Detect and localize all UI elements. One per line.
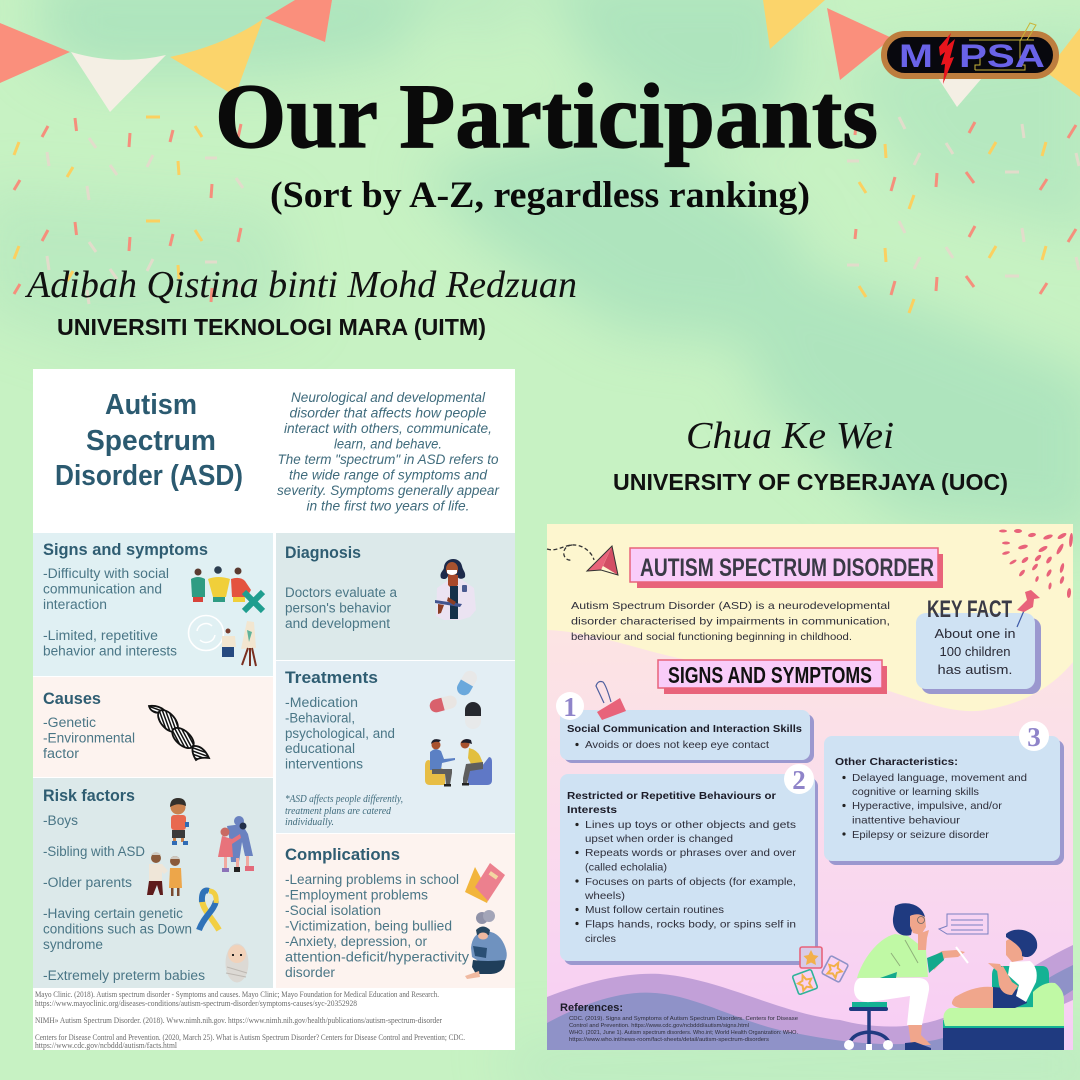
bottom waves: [547, 945, 1073, 1050]
panel: risk factors: -Older parents: [43, 875, 132, 890]
note: treatment plans are catered: [285, 806, 392, 817]
intro paragraph: behaviour and social functioning beginning in childhood.: [571, 631, 852, 643]
panel: risk factors: -Sibling with ASD: [43, 844, 145, 859]
therapist: [854, 903, 968, 1050]
panel: risk factors: -Boys: [43, 813, 78, 828]
panel: complications: [276, 834, 515, 988]
icon: repeat circle and painter: [188, 616, 256, 666]
panel title: [55, 389, 243, 492]
panel: risk factors: [33, 778, 273, 988]
card 2: restricted behaviours: (called echolalia): [585, 862, 667, 874]
panel: complications: -Anxiety, depression, or: [285, 934, 427, 949]
panel: left infographic: [33, 369, 515, 1050]
icon: sad person: [465, 910, 507, 979]
panel: complications: disorder: [285, 965, 336, 980]
panel: risk factors: syndrome: [43, 937, 103, 952]
note: [285, 794, 403, 828]
panel: signs and symptoms: behavior and interests: [43, 644, 177, 658]
icon: push pin: [1017, 590, 1040, 627]
panel: signs and symptoms: -Difficulty with social: [43, 566, 169, 581]
intro text: in the first two years of life.: [306, 498, 470, 514]
icon: boy: [170, 798, 189, 845]
bunting flags right: [763, 0, 1080, 107]
intro text: interact with others, communicate,: [284, 421, 492, 436]
card 2: restricted behaviours: Focuses on parts of objects (for example,: [585, 876, 796, 888]
icon: notebooks: [465, 863, 505, 903]
panel: diagnosis: Doctors evaluate a: [285, 585, 397, 600]
card 1: social communication: Social Communication and Interaction Skills: [567, 723, 802, 735]
university 1: UNIVERSITI TEKNOLOGI MARA (UITM): [57, 314, 486, 340]
references list: [560, 1002, 798, 1043]
card 3: other characteristics: [824, 736, 1064, 865]
card 3: other characteristics: cognitive or learning skills: [852, 786, 979, 798]
intro text: The term "spectrum" in ASD refers to: [278, 452, 499, 467]
references: https://www.mayoclinic.org/diseases-conditions/autism-spectrum-disorder/symptoms-causes/syc-20352928: [35, 998, 357, 1008]
intro paragraph: [571, 600, 890, 643]
dots decoration: [999, 529, 1073, 598]
references list: https://www.who.int/news-room/fact-sheets/detail/autism-spectrum-disorders: [569, 1037, 769, 1043]
card 3: other characteristics: Delayed language, movement and: [852, 772, 1027, 784]
confetti right: [847, 117, 1079, 313]
panel title: Disorder (ASD): [55, 460, 243, 492]
card 2: restricted behaviours: circles: [585, 933, 616, 945]
panel: risk factors: Risk factors: [43, 786, 135, 805]
stool: [844, 1002, 893, 1050]
card 1: social communication: Avoids or does not keep eye contact: [585, 739, 769, 751]
university 2: UNIVERSITY OF CYBERJAYA (UOC): [613, 469, 1008, 495]
panel: risk factors: -Having certain genetic: [43, 906, 183, 921]
panel: causes: Causes: [43, 690, 101, 708]
panel: complications: -Employment problems: [285, 888, 428, 902]
card 3: other characteristics: Other Characteristics:: [835, 756, 958, 768]
panel: treatments: -Behavioral,: [285, 710, 355, 726]
icon: elderly couple: [147, 852, 182, 896]
card 2: restricted behaviours: upset when order is changed: [585, 833, 733, 845]
card 2: restricted behaviours: Flaps hands, rocks body, or spins self in: [585, 918, 796, 930]
panel: risk factors: conditions such as Down: [43, 922, 192, 936]
panel: treatments: educational: [285, 741, 355, 756]
icon: friends with cross: [191, 566, 263, 611]
panel: complications: -Victimization, being bullied: [285, 918, 452, 934]
references: https://www.cdc.gov/ncbddd/autism/facts.html: [35, 1040, 178, 1050]
intro text: Neurological and developmental: [291, 390, 486, 405]
card 3: other characteristics: Hyperactive, impulsive, and/or: [852, 800, 1003, 812]
panel: treatments: [276, 661, 515, 833]
bunting flags left: [0, 0, 332, 112]
participant name 2: Chua Ke Wei: [686, 415, 894, 457]
references: Mayo Clinic. (2018). Autism spectrum disorder - Symptoms and causes. Mayo Clinic; Mayo Foundation for Medical Education and Research.: [35, 989, 439, 999]
panel: causes: -Genetic: [43, 715, 96, 730]
panel: treatments: interventions: [285, 756, 363, 772]
couch: [943, 966, 1064, 1050]
panel title: Autism: [105, 389, 197, 421]
panel: diagnosis: person's behavior: [285, 600, 391, 616]
intro text: disorder that affects how people: [290, 406, 486, 420]
panel: right infographic: [547, 524, 1073, 1050]
heading: signs and symptoms: SIGNS AND SYMPTOMS: [668, 662, 872, 688]
icon: paper plane with dashed trail: [547, 545, 618, 575]
panel: causes: [33, 677, 273, 777]
panel: causes: -Environmental: [43, 730, 135, 746]
icon: counselling session: [425, 739, 492, 786]
participant name 1: Adibah Qistina binti Mohd Redzuan: [24, 264, 577, 306]
logo: MYPSA: M: [899, 38, 933, 74]
panel: treatments: Treatments: [285, 668, 378, 687]
icon: baby: [226, 944, 248, 982]
references list: WHO. (2021, June 1). Autism spectrum disorders. Who.int; World Health Organization: WHO.: [569, 1030, 798, 1036]
panel: diagnosis: Diagnosis: [285, 543, 361, 562]
panel: signs and symptoms: [33, 533, 273, 676]
badge 2: 2: [792, 765, 806, 795]
speech bubble: [939, 914, 988, 934]
heading: autism spectrum disorder: [630, 548, 943, 588]
key fact card: [916, 596, 1041, 694]
icon: binder clip: [596, 682, 626, 720]
subtitle: (Sort by A-Z, regardless ranking): [270, 175, 810, 216]
badge 1: [556, 692, 584, 722]
card 2: restricted behaviours: Restricted or Repetitive Behaviours or: [567, 790, 776, 802]
panel: complications: attention-deficit/hyperactivity: [285, 950, 469, 964]
heading: autism spectrum disorder: AUTISM SPECTRUM DISORDER: [640, 554, 934, 582]
card 2: restricted behaviours: Lines up toys or other objects and gets: [585, 819, 796, 831]
card 3: other characteristics: Epilepsy or seizure disorder: [852, 829, 990, 841]
logo: MYPSA: PSA: [959, 38, 1045, 74]
key fact card: About one in: [934, 626, 1016, 641]
heading: signs and symptoms: [658, 660, 887, 694]
icon: doctor: [435, 559, 476, 620]
card 3: other characteristics: inattentive behaviour: [852, 814, 961, 826]
icon: star blocks: [792, 947, 849, 995]
illustration: therapist and child: [844, 903, 1064, 1050]
panel: complications: -Learning problems in school: [285, 872, 459, 887]
confetti left: [14, 117, 243, 304]
panel: complications: Complications: [285, 845, 400, 864]
panel: treatments: -Medication: [285, 695, 358, 710]
panel: treatments: psychological, and: [285, 726, 395, 741]
card 2: restricted behaviours: [560, 774, 818, 965]
panel: signs and symptoms: -Limited, repetitive: [43, 628, 158, 643]
note: *ASD affects people differently,: [285, 794, 403, 805]
panel: risk factors: -Extremely preterm babies: [43, 968, 205, 983]
card 2: restricted behaviours: Must follow certain routines: [585, 904, 724, 916]
key fact card: has autism.: [938, 662, 1012, 677]
icon: pills: [428, 668, 481, 729]
references: NIMH» Autism Spectrum Disorder. (2018). Www.nimh.nih.gov. https://www.nimh.nih.gov/health/publications/autism-spectrum-disorder: [35, 1015, 442, 1025]
intro text: [277, 390, 499, 514]
icon: dna helix: [149, 706, 209, 760]
references: Centers for Disease Control and Prevention. (2020, March 25). What is Autism Spectrum Disorder? Centers for Disease Control and Prevention; CDC.: [35, 1032, 465, 1042]
panel: signs and symptoms: communication and: [43, 582, 162, 596]
references list: CDC. (2019). Signs and Symptoms of Autism Spectrum Disorders. Centers for Disease: [569, 1016, 798, 1022]
intro text: learn, and behave.: [334, 436, 442, 452]
badge 3: 3: [1027, 722, 1041, 752]
icon: siblings hugging: [218, 816, 254, 872]
panel title: Spectrum: [86, 425, 216, 457]
panel: diagnosis: [276, 533, 515, 660]
card 1: social communication: [560, 710, 814, 763]
badge 1: 1: [563, 692, 577, 722]
note: individually.: [285, 817, 334, 828]
intro text: the wide range of symptoms and: [289, 468, 487, 482]
intro text: severity. Symptoms generally appear: [277, 483, 499, 498]
references: [35, 989, 465, 1050]
key fact card: KEY FACT: [927, 596, 1012, 623]
intro paragraph: disorder characterised by impairments in communication,: [571, 616, 890, 628]
child: [952, 930, 1037, 1008]
card 2: restricted behaviours: wheels): [584, 890, 625, 902]
badge 2: [784, 764, 814, 795]
panel: signs and symptoms: Signs and symptoms: [43, 541, 208, 559]
panel: diagnosis: and development: [285, 616, 390, 631]
panel: complications: -Social isolation: [285, 903, 381, 918]
references list: References:: [560, 1002, 623, 1014]
intro paragraph: Autism Spectrum Disorder (ASD) is a neurodevelopmental: [571, 600, 890, 612]
card 2: restricted behaviours: Interests: [567, 804, 617, 816]
title: Our Participants: [215, 65, 878, 167]
logo: MYPSA: [884, 23, 1056, 84]
panel: signs and symptoms: interaction: [43, 597, 107, 612]
panel: causes: factor: [43, 746, 80, 761]
badge 3: [1019, 721, 1049, 752]
key fact card: 100 children: [940, 644, 1010, 659]
icon: awareness ribbon: [199, 891, 219, 930]
card 2: restricted behaviours: Repeats words or phrases over and over: [585, 847, 797, 859]
references list: Control and Prevention. https://www.cdc.gov/ncbddd/autism/signs.html: [569, 1023, 749, 1029]
